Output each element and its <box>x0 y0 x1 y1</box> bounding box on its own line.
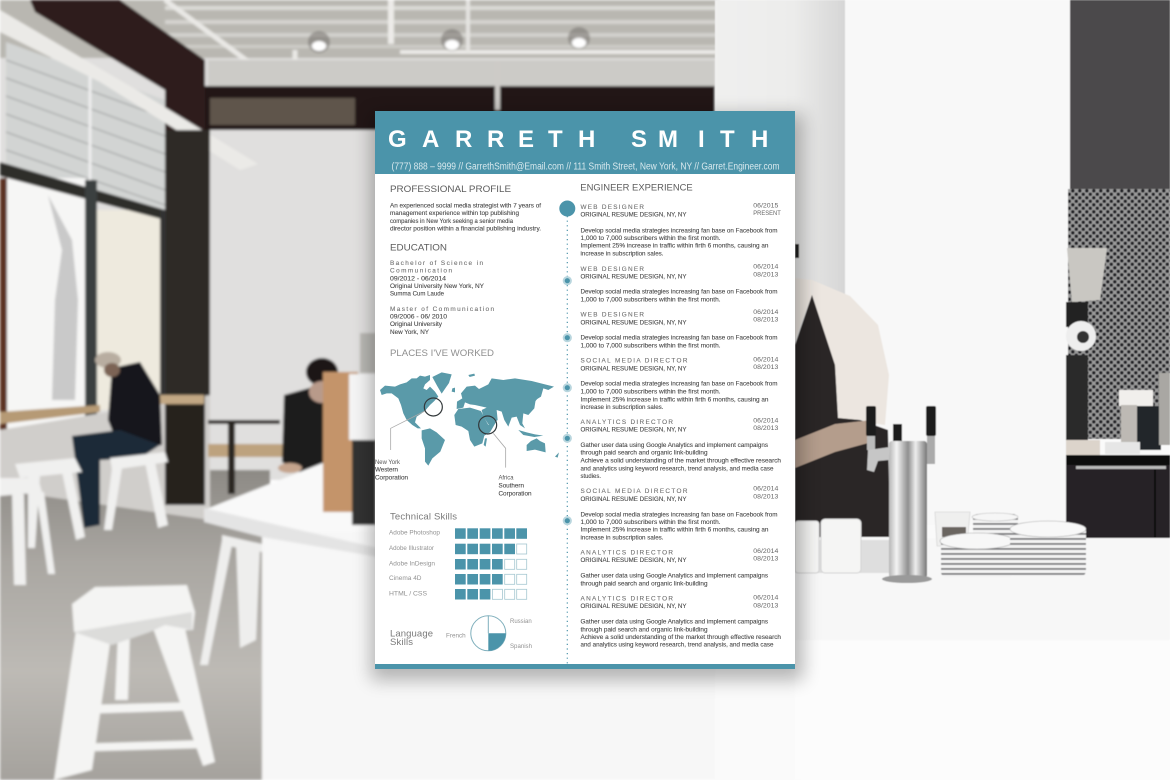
job 3: WEB DESIGNER <box>580 312 644 319</box>
map label: New York: Western <box>375 466 398 474</box>
barista <box>795 244 890 537</box>
resume sheet <box>375 111 795 669</box>
job 5: ANALYTICS DIRECTOR <box>580 419 673 426</box>
job 3: 1,000 to 7,000 subscribers within the first month. <box>580 342 721 349</box>
wood menu sign <box>323 333 377 525</box>
ceiling <box>0 0 716 120</box>
wall band and dark beam <box>205 60 715 130</box>
job 7: 06/2014 <box>753 548 779 555</box>
job 4: Develop social media strategies increasing fan base on Facebook from <box>580 381 778 388</box>
education: 09/2012 - 06/2014 <box>390 276 446 282</box>
job 3: 08/2013 <box>753 317 779 324</box>
counter surface <box>795 538 1170 640</box>
job 1: increase in subscription sales. <box>580 250 664 258</box>
technical skills: Adobe InDesign <box>389 560 435 567</box>
table tops <box>0 405 100 424</box>
coffee grinder <box>1066 248 1107 440</box>
job 8: ORIGINAL RESUME DESIGN, NY, NY <box>580 603 687 610</box>
job 8: 08/2013 <box>753 602 779 609</box>
job 1: Develop social media strategies increasing fan base on Facebook from <box>580 228 778 234</box>
language skills: Russian <box>510 618 532 625</box>
job 8: Gather user data using Google Analytics and implement campaigns <box>580 619 769 626</box>
coffee cups and tins <box>1066 373 1170 456</box>
job 5: 08/2013 <box>753 425 779 432</box>
job 7: ORIGINAL RESUME DESIGN, NY, NY <box>580 557 687 564</box>
contact line: (777) 888 – 9999 // GarrethSmith@Email.com // 111 Smith Street, New York, NY // Garret.Engineer.com <box>392 162 780 172</box>
professional profile: companies in New York seeking a senior media <box>390 218 513 225</box>
person left <box>72 352 162 528</box>
job 2: ORIGINAL RESUME DESIGN, NY, NY <box>580 273 687 280</box>
map label: New York <box>375 459 408 482</box>
counter <box>204 462 378 556</box>
wall <box>208 130 378 475</box>
map location rings and leader lines <box>391 398 506 468</box>
job 1: ORIGINAL RESUME DESIGN, NY, NY <box>580 212 687 219</box>
job 4: 06/2014 <box>753 356 779 363</box>
job 8: 06/2014 <box>753 594 779 601</box>
job 3: 06/2014 <box>753 309 779 316</box>
job 4: Implement 25% increase in traffic within firth 6 months, causing an <box>580 396 769 403</box>
plate stacks <box>935 512 1086 577</box>
technical skills: Cinema 4D <box>389 575 422 582</box>
job 1: PRESENT <box>753 210 781 217</box>
places worked heading: PLACES I'VE WORKED <box>390 348 494 359</box>
job 4: increase in subscription sales. <box>580 404 664 411</box>
job 4: ORIGINAL RESUME DESIGN, NY, NY <box>580 365 687 372</box>
stool by counter <box>200 535 262 665</box>
professional profile: An experienced social media strategist with 7 years of <box>390 202 541 210</box>
language skills: Spanish <box>510 643 532 650</box>
map label: New York: Corporation <box>375 474 408 482</box>
job 2: 1,000 to 7,000 subscribers within the first month. <box>580 296 721 303</box>
technical skills: HTML / CSS <box>389 590 427 597</box>
background photo: cafe right side <box>715 0 1170 780</box>
job 8: through paid search and organic link-building <box>580 626 708 633</box>
perforated panel <box>1068 189 1170 439</box>
job 5: and analytics using keyword research, trend analysis, and media case <box>580 465 774 472</box>
job 5: Gather user data using Google Analytics and implement campaigns <box>580 442 769 449</box>
technical skills: Technical Skills <box>390 512 457 522</box>
job 8: Achieve a solid understanding of the market through effective research <box>580 634 781 641</box>
job 2: WEB DESIGNER <box>580 266 644 273</box>
job 1: 06/2015 <box>753 202 779 210</box>
language skills: Language <box>390 628 433 640</box>
education <box>390 242 494 336</box>
big stool foreground <box>54 585 215 780</box>
job 1 <box>580 202 781 258</box>
education: Master of Communication <box>390 306 494 313</box>
diagonal white beam <box>0 10 258 170</box>
job 7 <box>580 548 779 587</box>
education: 09/2006 - 06/ 2010 <box>390 314 447 320</box>
job 7: Gather user data using Google Analytics and implement campaigns <box>580 573 769 580</box>
education: Original University New York, NY <box>390 283 485 290</box>
job 6: 08/2013 <box>753 493 779 500</box>
beer tap tower <box>866 406 936 583</box>
job 6: Implement 25% increase in traffic within firth 6 months, causing an <box>580 527 769 534</box>
job 7: ANALYTICS DIRECTOR <box>580 549 673 556</box>
world map <box>380 372 559 468</box>
job 4: SOCIAL MEDIA DIRECTOR <box>580 358 688 365</box>
job 6: increase in subscription sales. <box>580 534 664 541</box>
job 2 <box>580 264 779 303</box>
professional profile: PROFESSIONAL PROFILE <box>390 184 511 195</box>
job 4: 08/2013 <box>753 364 779 371</box>
map label: Africa: Corporation <box>498 490 532 498</box>
education: Communication <box>390 268 452 274</box>
map label: Africa: Southern <box>498 482 524 490</box>
column and frames <box>165 130 210 410</box>
language skills <box>390 616 532 651</box>
job 5: studies. <box>580 473 601 480</box>
language skills: Skills <box>390 637 413 648</box>
header band <box>375 111 795 174</box>
job 4 <box>580 356 779 411</box>
job 6 <box>580 486 779 541</box>
job 7: through paid search and organic link-building <box>580 580 708 587</box>
name title: GARRETH SMITH <box>388 126 768 153</box>
education: Original University <box>390 321 443 328</box>
dark timber top left <box>30 0 205 135</box>
black cabinets <box>1066 455 1170 540</box>
map label: New York: New York <box>375 459 401 466</box>
bottom band <box>375 664 795 669</box>
job 4: 1,000 to 7,000 subscribers within the first month. <box>580 388 721 395</box>
professional profile: management experience within top publishing <box>390 210 519 217</box>
job 1: WEB DESIGNER <box>580 204 644 211</box>
floor <box>0 470 270 780</box>
education: New York, NY <box>390 329 430 336</box>
job 6: 06/2014 <box>753 486 779 493</box>
job 5: 06/2014 <box>753 417 779 424</box>
resume drop shadow <box>371 114 803 680</box>
dark wall top right <box>1070 0 1170 189</box>
job 6: ORIGINAL RESUME DESIGN, NY, NY <box>580 496 687 503</box>
education: Bachelor of Science in <box>390 260 483 267</box>
job 8: ANALYTICS DIRECTOR <box>580 595 673 602</box>
job 2: 06/2014 <box>753 264 779 270</box>
job 8 <box>580 594 781 649</box>
job 5: through paid search and organic link-building <box>580 450 708 457</box>
skill level squares <box>455 528 527 600</box>
job 6: Develop social media strategies increasing fan base on Facebook from <box>580 511 778 518</box>
job 2: 08/2013 <box>753 272 779 279</box>
job 3: ORIGINAL RESUME DESIGN, NY, NY <box>580 319 687 326</box>
technical skills: Adobe Illustrator <box>389 545 435 552</box>
person at counter <box>278 358 340 473</box>
job 6: 1,000 to 7,000 subscribers within the first month. <box>580 519 721 526</box>
education: Summa Cum Laude <box>390 290 444 298</box>
language skills: French <box>446 632 466 640</box>
window upper <box>6 42 165 212</box>
job 2: Develop social media strategies increasing fan base on Facebook from <box>580 289 778 296</box>
tree outside window <box>48 195 78 400</box>
job 8: and analytics using keyword research, trend analysis, and media case <box>580 642 774 649</box>
language pie chart <box>471 616 506 651</box>
white cups <box>795 519 861 573</box>
job 3 <box>580 309 779 349</box>
map label: Africa <box>498 474 532 498</box>
job 1: Implement 25% increase in traffic within firth 6 months, causing an <box>580 243 769 250</box>
education: EDUCATION <box>390 242 447 254</box>
technical skills: Adobe Photoshop <box>389 530 440 536</box>
job 7: 08/2013 <box>753 556 779 563</box>
job 5 <box>580 417 781 480</box>
stools <box>0 452 168 585</box>
map label: Africa: Africa <box>498 474 514 482</box>
professional profile <box>390 184 541 232</box>
job 3: Develop social media strategies increasing fan base on Facebook from <box>580 335 778 342</box>
experience timeline <box>559 200 575 664</box>
job 1: 1,000 to 7,000 subscribers within the first month. <box>580 235 721 242</box>
job 5: ORIGINAL RESUME DESIGN, NY, NY <box>580 427 687 434</box>
experience heading: ENGINEER EXPERIENCE <box>580 182 693 194</box>
job 6: SOCIAL MEDIA DIRECTOR <box>580 488 688 495</box>
professional profile: director position within a financial publishing industry. <box>390 226 541 232</box>
job 5: Achieve a solid understanding of the market through effective research <box>580 457 781 464</box>
technical skills <box>389 512 527 600</box>
background photo: cafe left side <box>0 0 802 780</box>
